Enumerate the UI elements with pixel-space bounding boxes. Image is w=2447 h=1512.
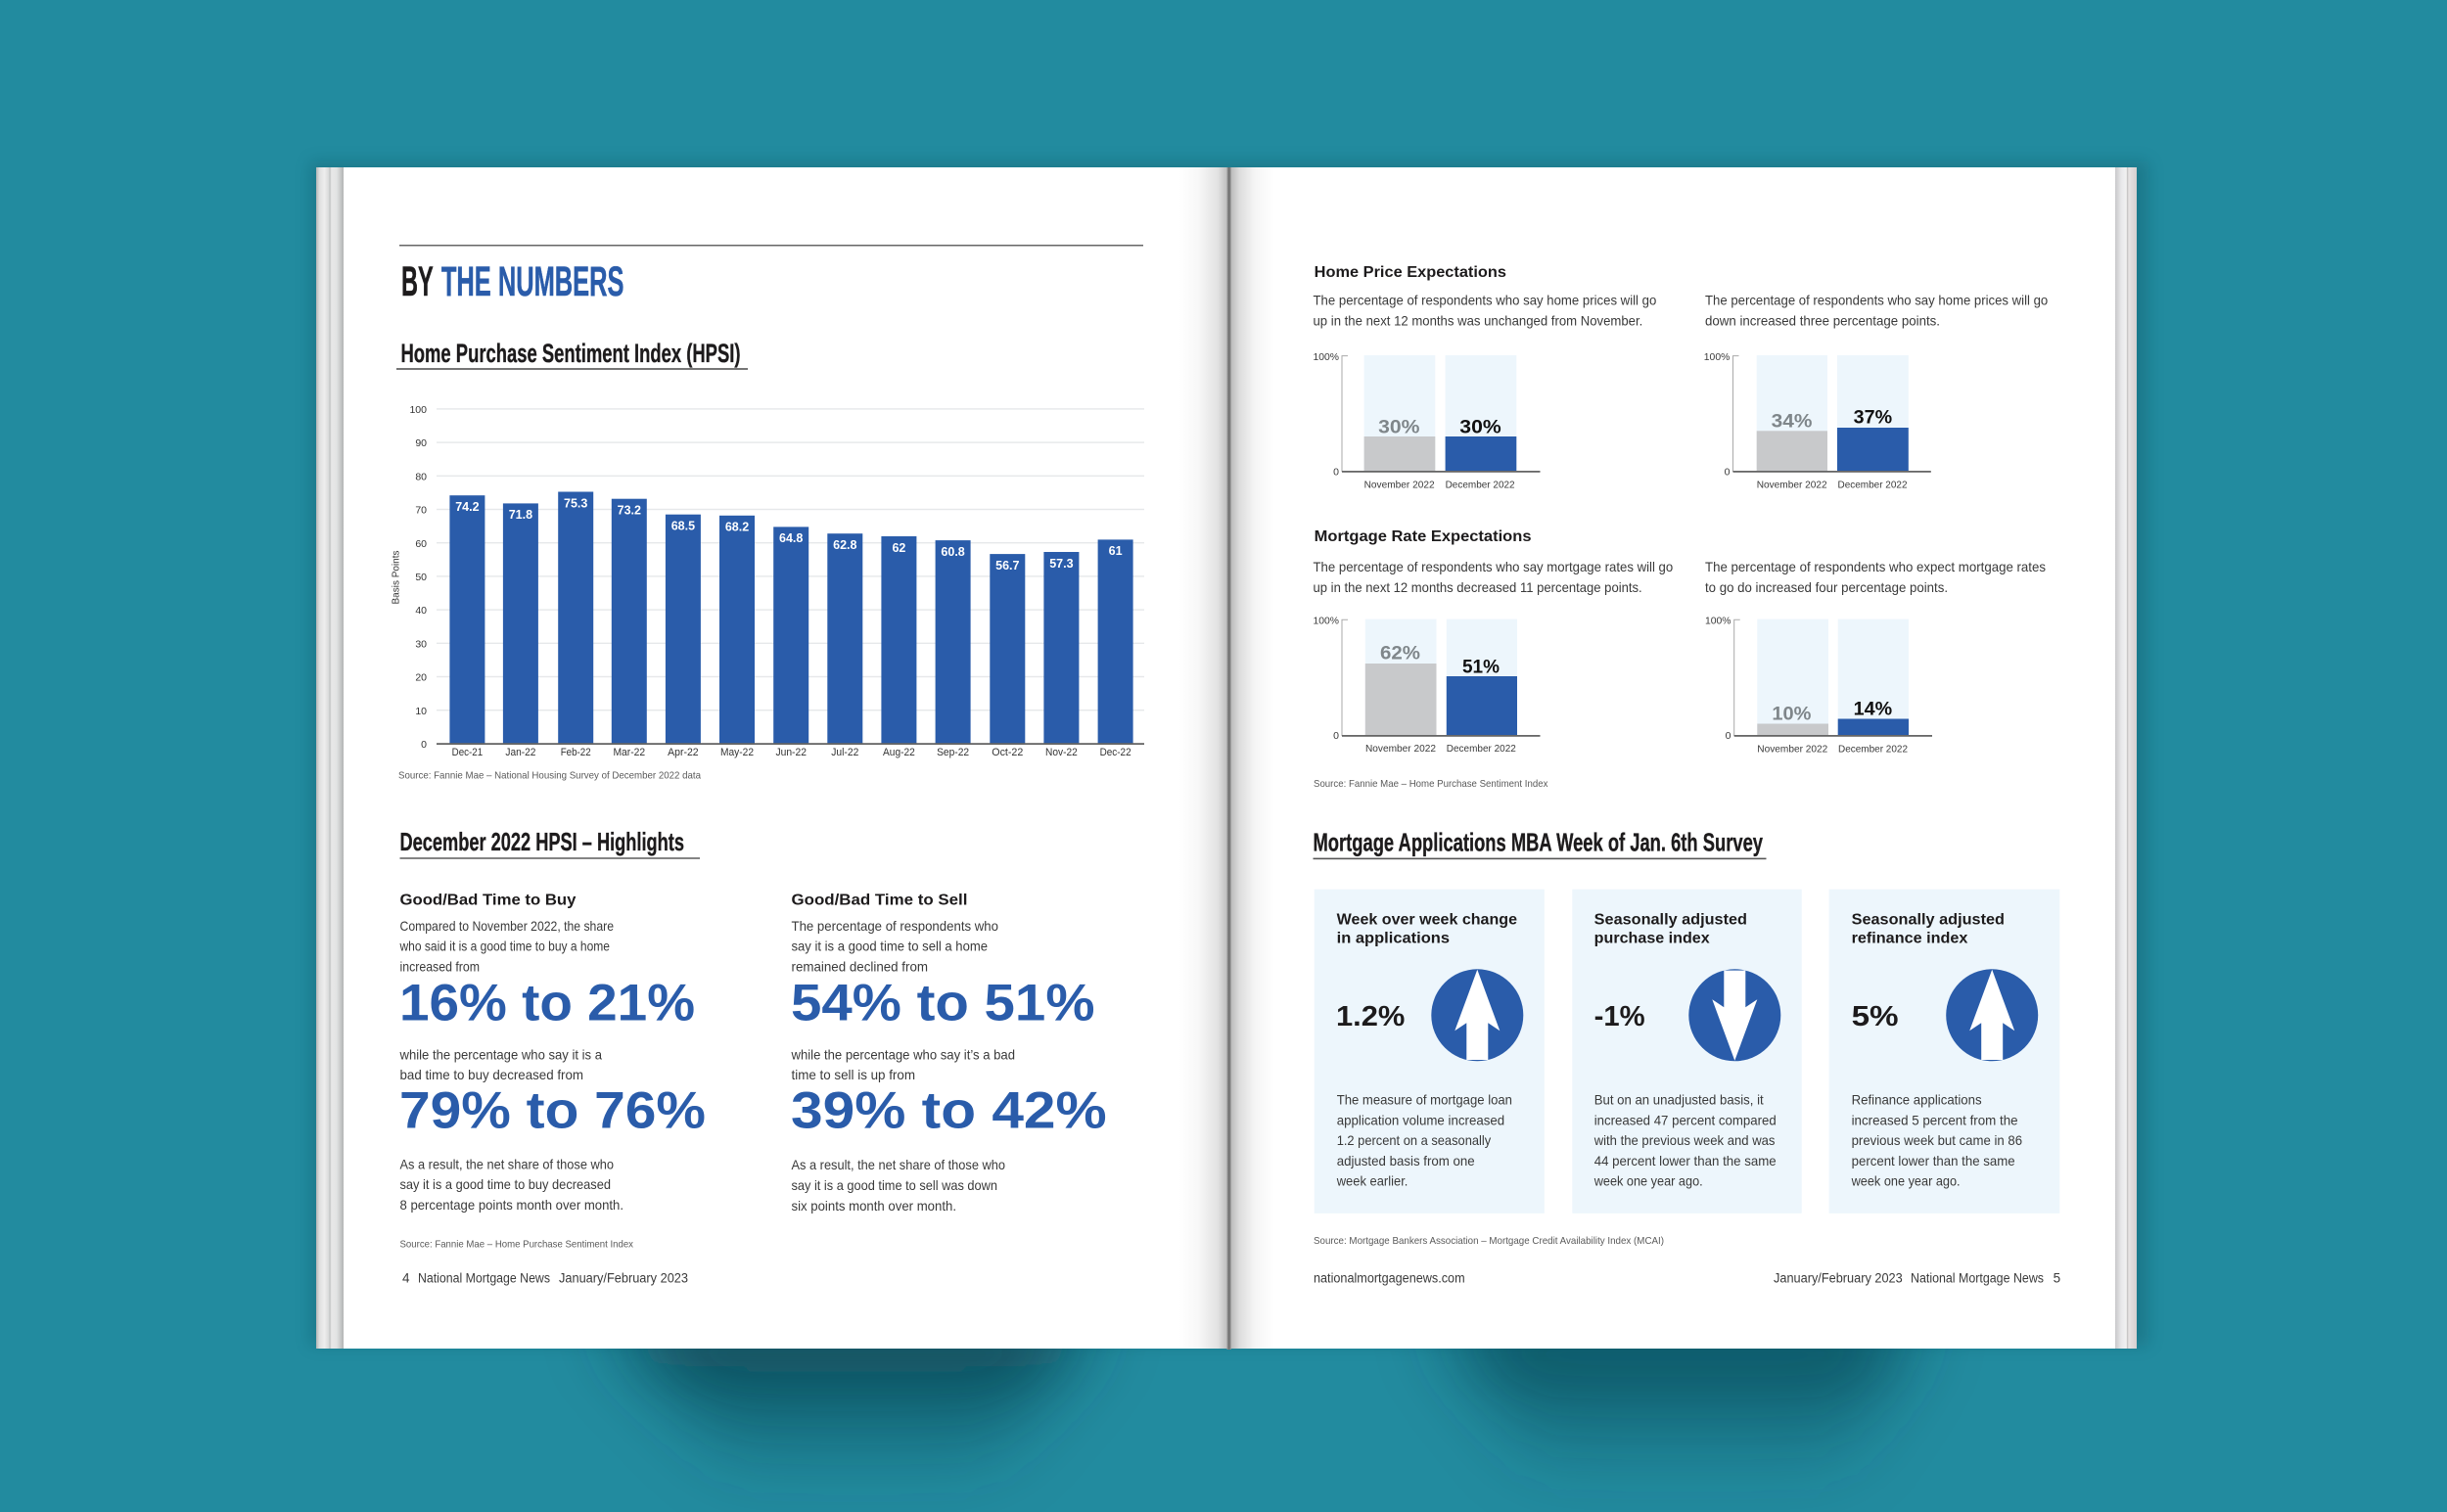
panel: refinance index: [1829, 890, 2059, 1214]
chart: rates down: 100%: [1705, 615, 1731, 626]
panel: good/bad time to sell: Good/Bad Time to Sell: [791, 892, 967, 908]
text: rates down: to go do increased four percentage points.: [1705, 579, 1948, 595]
footer: right page: January/February 2023: [1774, 1271, 1903, 1286]
panel: good/bad time to buy: As a result, the net share of those who: [399, 1156, 614, 1171]
panel: good/bad time to buy: who said it is a good time to buy a home: [399, 939, 610, 954]
description: [1336, 1092, 1512, 1188]
panel: good/bad time to buy: 79% to 76%: [399, 1082, 706, 1140]
text: rates down: The percentage of respondents who expect mortgage rates: [1705, 559, 2046, 574]
chart: rates down: [1705, 615, 1932, 756]
description: Refinance applications: [1852, 1092, 1982, 1108]
title block: THE NUMBERS: [441, 258, 624, 305]
y axis labels: 50: [415, 572, 427, 583]
heading: mortgage applications: Mortgage Applications MBA Week of Jan. 6th Survey: [1314, 827, 1763, 856]
panel: good/bad time to buy: bad time to buy decreased from: [399, 1067, 583, 1082]
source: expectations: Source: Fannie Mae – Home Purchase Sentiment Index: [1314, 778, 1548, 790]
y axis labels: 30: [415, 638, 427, 650]
y axis labels: 20: [415, 672, 427, 684]
chart: prices down: 37%: [1854, 408, 1892, 429]
description: [1593, 1092, 1777, 1188]
heading: HPSI chart: Home Purchase Sentiment Index (HPSI): [401, 339, 740, 368]
description: application volume increased: [1337, 1112, 1504, 1127]
description: previous week but came in 86: [1852, 1132, 2022, 1148]
panel: home price expectations: Home Price Expectations: [1315, 264, 1506, 281]
chart: rates down: 0: [1726, 730, 1731, 742]
x axis labels: Mar-22: [613, 747, 645, 758]
chart: prices down: 0: [1725, 466, 1731, 478]
description: increased 47 percent compared: [1594, 1112, 1777, 1127]
panel: good/bad time to sell: say it is a good time to sell was down: [791, 1177, 997, 1193]
value: -1%: [1594, 1001, 1645, 1032]
left gutter shading: [1179, 167, 1227, 1349]
right page edge stack: [2115, 167, 2137, 1349]
x axis labels: Jan-22: [505, 747, 535, 758]
chart: prices down: November 2022: [1757, 480, 1827, 491]
description: increased 5 percent from the: [1852, 1112, 2018, 1127]
panel: good/bad time to sell: time to sell is up from: [791, 1067, 915, 1082]
x axis labels: Dec-22: [1100, 747, 1131, 758]
chart: prices up: 30%: [1459, 417, 1501, 438]
description: with the previous week and was: [1593, 1132, 1776, 1148]
x axis labels: Apr-22: [668, 747, 699, 758]
chart: prices up: 100%: [1314, 351, 1339, 363]
bars: [449, 491, 1133, 744]
text: prices up: up in the next 12 months was unchanged from November.: [1314, 313, 1642, 329]
panel: good/bad time to buy: Compared to November 2022, the share: [399, 918, 614, 934]
bar values: 64.8: [779, 531, 803, 545]
left page: [344, 167, 1229, 1349]
bar values: [455, 496, 1123, 573]
panel: week over week change: in applications: [1337, 931, 1450, 947]
footer: right page: nationalmortgagenews.com: [1314, 1271, 1465, 1286]
description: The measure of mortgage loan: [1337, 1092, 1512, 1108]
chart: prices up: December 2022: [1446, 480, 1515, 491]
chart: rates up: 62%: [1380, 644, 1420, 664]
panel: good/bad time to buy: Good/Bad Time to Buy: [399, 892, 577, 908]
chart: rates down: 14%: [1854, 699, 1892, 719]
text: prices up: The percentage of respondents who say home prices will go: [1314, 292, 1656, 307]
bar values: 71.8: [509, 508, 532, 522]
chart: prices down: [1704, 351, 1931, 491]
y axis labels: 90: [415, 437, 427, 449]
chart: prices up: 30%: [1378, 417, 1420, 438]
chart: rates down: 10%: [1772, 704, 1812, 724]
x axis labels: May-22: [720, 747, 754, 758]
bar values: 75.3: [564, 496, 587, 510]
panel: good/bad time to buy: while the percentage who say it is a: [399, 1047, 602, 1063]
chart: prices down: December 2022: [1838, 480, 1908, 491]
panel: mortgage rate expectations: [1314, 528, 2046, 756]
panel: week over week change: [1315, 890, 1545, 1214]
chart: rates down: November 2022: [1757, 744, 1827, 756]
text: prices down: [1705, 292, 2048, 329]
book shadows: [310, 161, 2148, 1468]
panel: good/bad time to sell: As a result, the net share of those who: [791, 1157, 1005, 1172]
panel: purchase index: [1572, 890, 1802, 1214]
bar values: 56.7: [995, 559, 1020, 573]
footer: left page: January/February 2023: [559, 1271, 688, 1286]
panel: home price expectations: [1314, 264, 2048, 491]
y axis labels: 10: [415, 706, 427, 717]
footer: right page: [1314, 1271, 2060, 1286]
panel: purchase index: Seasonally adjusted: [1594, 911, 1747, 928]
x axis labels: [452, 747, 1131, 758]
chart: prices up: [1314, 351, 1541, 491]
text: prices down: The percentage of respondents who say home prices will go: [1705, 292, 2048, 307]
x axis labels: Nov-22: [1045, 747, 1078, 758]
panel: good/bad time to buy: increased from: [399, 958, 480, 974]
panel: good/bad time to sell: [791, 892, 1107, 1214]
description: adjusted basis from one: [1337, 1153, 1475, 1168]
y axis labels: [409, 404, 427, 751]
panel: good/bad time to sell: remained declined from: [791, 958, 928, 974]
description: week one year ago.: [1593, 1172, 1703, 1188]
right gutter shading: [1230, 167, 1274, 1349]
bar values: 61: [1109, 544, 1123, 558]
bar values: 57.3: [1049, 557, 1074, 571]
chart: rates up: 51%: [1462, 657, 1500, 677]
left page edge stack: [316, 167, 344, 1349]
x axis labels: Dec-21: [452, 747, 483, 758]
text: prices up: [1314, 292, 1656, 329]
source: chart: Source: Fannie Mae – National Housing Survey of December 2022 data: [398, 769, 701, 781]
icon: up arrow: [1431, 969, 1523, 1061]
x axis labels: Feb-22: [561, 747, 591, 758]
y axis labels: 0: [421, 739, 427, 751]
chart: prices down: 34%: [1772, 411, 1813, 433]
bar values: 68.2: [725, 521, 749, 534]
text: rates down: [1705, 559, 2046, 595]
x axis labels: Aug-22: [883, 747, 915, 758]
chart: rates up: 100%: [1314, 615, 1339, 626]
text: prices down: down increased three percentage points.: [1705, 313, 1940, 329]
chart: rates down: December 2022: [1838, 744, 1908, 756]
y axis labels: 80: [415, 471, 427, 482]
y axis labels: 60: [415, 538, 427, 550]
description: week one year ago.: [1851, 1172, 1961, 1188]
right page: [1229, 167, 2115, 1349]
y axis labels: 100: [409, 404, 427, 416]
chart: prices up: 0: [1333, 466, 1339, 478]
y axis title: Basis Points: [390, 550, 401, 605]
description: week earlier.: [1336, 1172, 1408, 1188]
y axis labels: 70: [415, 505, 427, 517]
y axis labels: 40: [415, 605, 427, 617]
panel: mortgage rate expectations: Mortgage Rate Expectations: [1315, 528, 1532, 545]
panel: good/bad time to buy: 8 percentage points month over month.: [399, 1197, 623, 1213]
panel: good/bad time to buy: 16% to 21%: [399, 975, 695, 1031]
text: rates up: up in the next 12 months decreased 11 percentage points.: [1314, 579, 1642, 595]
panel: good/bad time to buy: say it is a good time to buy decreased: [399, 1176, 611, 1192]
panel: purchase index: purchase index: [1594, 931, 1710, 947]
source: applications: Source: Mortgage Bankers Association – Mortgage Credit Availability Index (MCAI): [1314, 1235, 1664, 1247]
panel: refinance index: refinance index: [1852, 931, 1968, 947]
value: 1.2%: [1336, 1001, 1406, 1032]
footer: right page: National Mortgage News: [1911, 1271, 2044, 1286]
footer: left page: 4: [402, 1271, 410, 1286]
panel: good/bad time to sell: The percentage of respondents who: [791, 918, 998, 934]
x axis labels: Jun-22: [775, 747, 807, 758]
x axis labels: Sep-22: [937, 747, 969, 758]
description: But on an unadjusted basis, it: [1594, 1092, 1764, 1108]
panel: good/bad time to buy: [399, 892, 706, 1213]
title block: [399, 245, 1143, 305]
heading: highlights: December 2022 HPSI – Highlights: [399, 827, 684, 856]
footer: right page: 5: [2054, 1271, 2060, 1286]
chart: rates up: November 2022: [1365, 743, 1436, 755]
chart: rates up: [1314, 615, 1541, 755]
title block: BY: [401, 258, 434, 305]
description: 1.2 percent on a seasonally: [1337, 1132, 1491, 1148]
icon: up arrow: [1946, 969, 2038, 1061]
chart: prices up: November 2022: [1364, 480, 1435, 491]
source: highlights: Source: Fannie Mae – Home Purchase Sentiment Index: [399, 1239, 634, 1251]
spine: [1227, 167, 1231, 1350]
text: rates up: [1314, 559, 1673, 595]
panel: good/bad time to sell: while the percentage who say it’s a bad: [791, 1047, 1015, 1063]
panel: good/bad time to sell: say it is a good time to sell a home: [791, 939, 988, 954]
x axis labels: Jul-22: [831, 747, 858, 758]
bar values: 62: [892, 541, 905, 555]
description: 44 percent lower than the same: [1594, 1153, 1777, 1168]
chart: rates up: 0: [1333, 730, 1339, 742]
footer: left page: National Mortgage News: [418, 1271, 550, 1286]
panel: good/bad time to sell: six points month over month.: [791, 1198, 956, 1214]
book spread: [316, 167, 2137, 1350]
icon: down arrow: [1688, 969, 1780, 1061]
value: 5%: [1852, 1001, 1899, 1032]
x axis labels: Oct-22: [992, 747, 1023, 758]
panel: good/bad time to sell: 54% to 51%: [791, 975, 1094, 1031]
panel: good/bad time to sell: 39% to 42%: [791, 1082, 1107, 1140]
bar values: 68.5: [671, 519, 695, 532]
footer: left page: [402, 1271, 688, 1286]
bar values: 60.8: [941, 545, 965, 559]
description: [1851, 1092, 2022, 1188]
chart: prices down: 100%: [1704, 351, 1730, 363]
bar values: 62.8: [833, 538, 857, 552]
chart: rates up: December 2022: [1447, 743, 1516, 755]
text: rates up: The percentage of respondents who say mortgage rates will go: [1314, 559, 1673, 574]
panel: refinance index: Seasonally adjusted: [1852, 911, 2005, 928]
bar values: 73.2: [618, 503, 641, 517]
panel: week over week change: Week over week change: [1337, 911, 1517, 928]
bar chart: HPSI: [390, 404, 1144, 758]
bar values: 74.2: [455, 500, 480, 514]
description: percent lower than the same: [1852, 1153, 2015, 1168]
